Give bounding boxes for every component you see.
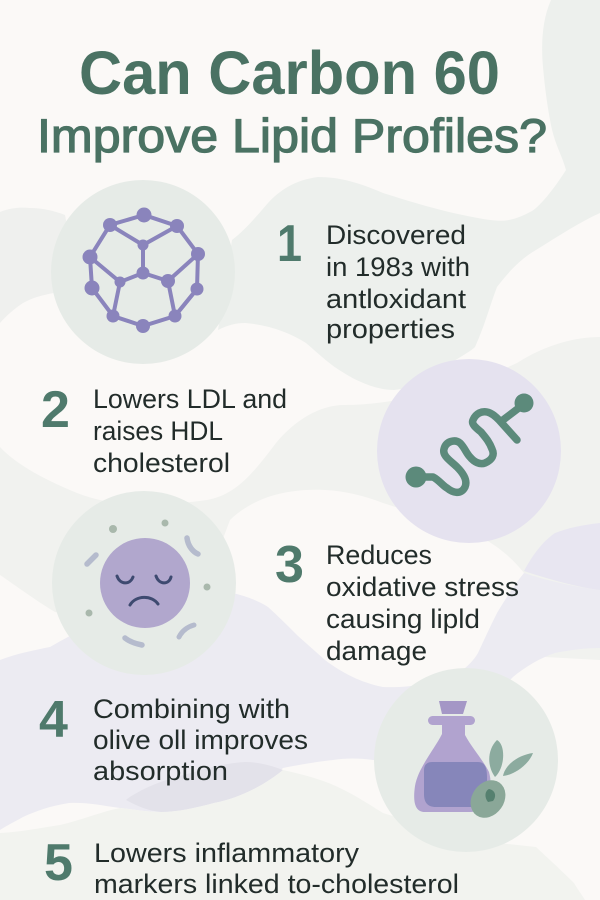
item 4 text: olive oll improves: [93, 725, 308, 755]
item 2 text: [93, 384, 287, 478]
item 1 text: antloxidant: [326, 284, 467, 314]
item 5 text: Lowers inflammatory: [94, 838, 360, 868]
icon: olive oil bottle: [374, 668, 558, 852]
item 1 text: Discovered: [326, 220, 466, 250]
item 4 text: Combining with: [93, 694, 290, 724]
title: Improve Lipid Profiles?: [37, 109, 547, 162]
item 4 text: absorption: [93, 756, 228, 786]
item 1 text: in 198з with: [326, 252, 470, 282]
item 3 text: Reduces: [326, 540, 432, 570]
icon: sad cell under oxidative stress: [52, 491, 236, 675]
item 2 number: 2: [41, 381, 70, 439]
item 1 text: [326, 220, 470, 344]
item 5 number: 5: [44, 834, 73, 892]
item 3 text: [326, 540, 519, 666]
icon: carbon 60 molecule: [51, 180, 235, 364]
item 5 text: [94, 838, 459, 899]
item 3 text: damage: [326, 636, 427, 666]
title: [37, 39, 547, 162]
item 4 number: 4: [39, 691, 68, 749]
icon: lipid squiggle: [377, 359, 561, 543]
item 1 number: 1: [277, 215, 302, 273]
item 2 text: raises HDL: [93, 416, 223, 446]
item 3 text: causing lipld: [326, 604, 480, 634]
item 5 text: markers linked to-cholesterol: [94, 869, 459, 899]
title: Can Carbon 60: [79, 39, 500, 107]
item 1 text: properties: [326, 314, 455, 344]
item 3 number: 3: [275, 536, 304, 594]
item 2 text: cholesterol: [93, 448, 230, 478]
item 2 text: Lowers LDL and: [93, 384, 287, 414]
item 3 text: oxidative stress: [326, 572, 519, 602]
item 4 text: [93, 694, 308, 786]
